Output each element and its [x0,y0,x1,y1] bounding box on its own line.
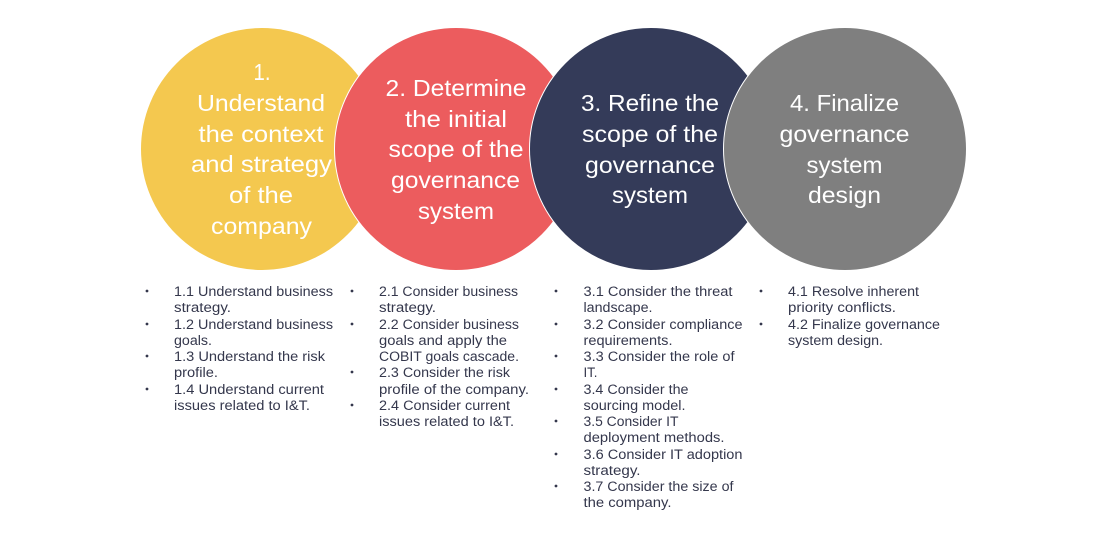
step 3 heading [581,90,719,208]
step 1 heading: and strategy [191,151,332,177]
step 2 list: 2.3 Consider the risk [379,365,510,380]
step 2 heading: system [418,198,494,224]
step 4 list [760,284,940,348]
step 2 heading: governance [391,167,520,193]
step 1 list: goals. [174,333,212,348]
step 2 circle [334,28,578,270]
step 3 list: 3.3 Consider the role of [584,349,735,364]
step 1 heading: the context [198,121,324,147]
step 3 list: IT. [584,365,598,380]
step 3 list: 3.6 Consider IT adoption [584,447,742,462]
step 3 heading: system [612,182,688,208]
step 2 list: 2.4 Consider current [379,398,510,413]
step 2 list [351,284,529,429]
step 1 list: 1.3 Understand the risk [174,349,325,364]
step 3 heading: scope of the [582,121,718,147]
step 3 list: the company. [584,495,672,510]
step 3 heading: 3. Refine the [581,90,719,116]
step 1 list: 1.4 Understand current [174,382,324,397]
step 1 heading: Understand [197,90,325,116]
step 4 heading [780,90,910,208]
step 4 circle [724,28,966,270]
step 4 list: system design. [788,333,883,348]
step 3 list: 3.7 Consider the size of [584,479,734,494]
step 2 list: strategy. [379,300,436,315]
step 4 list: priority conflicts. [788,300,896,315]
step 3 list: landscape. [584,300,652,315]
step 4 heading: design [808,182,881,208]
step 1 heading [191,59,332,239]
step 3 list: requirements. [584,333,672,348]
step 1 list: strategy. [174,300,231,315]
step 3 list: sourcing model. [584,398,686,413]
step 1 list [146,284,333,413]
step 3 list: 3.5 Consider IT [584,414,678,429]
step 3 list: deployment methods. [584,430,724,445]
step 2 heading [386,75,526,224]
step 2 list: issues related to I&T. [379,414,514,429]
step 2 list: 2.1 Consider business [379,284,518,299]
step 2 heading: 2. Determine [386,75,526,101]
step 4 list: 4.2 Finalize governance [788,317,940,332]
step 3 circle [530,28,772,270]
step 3 list: 3.1 Consider the threat [584,284,733,299]
step 2 heading: scope of the [388,136,524,162]
step 3 heading: governance [585,152,715,178]
step 2 list: COBIT goals cascade. [379,349,519,364]
step 4 heading: governance [780,121,910,147]
step 1 heading: 1. [254,59,270,85]
step 4 list: 4.1 Resolve inherent [788,284,919,299]
step 3 list [555,284,742,510]
step 2 list: goals and apply the [379,333,507,348]
step 3 list: strategy. [584,463,640,478]
step 2 list: profile of the company. [379,382,529,397]
step 1 heading: company [211,213,312,239]
step 2 list: 2.2 Consider business [379,317,519,332]
step 2 heading: the initial [405,106,507,132]
step 1 circle [141,28,383,270]
step 1 list: issues related to I&T. [174,398,310,413]
step 3 list: 3.2 Consider compliance [584,317,742,332]
step 4 heading: system [806,152,882,178]
step 1 heading: of the [229,182,293,208]
step 1 list: 1.2 Understand business [174,317,333,332]
step 1 list: profile. [174,365,218,380]
step 3 list: 3.4 Consider the [584,382,688,397]
step 4 heading: 4. Finalize [790,90,899,116]
step 1 list: 1.1 Understand business [174,284,333,299]
